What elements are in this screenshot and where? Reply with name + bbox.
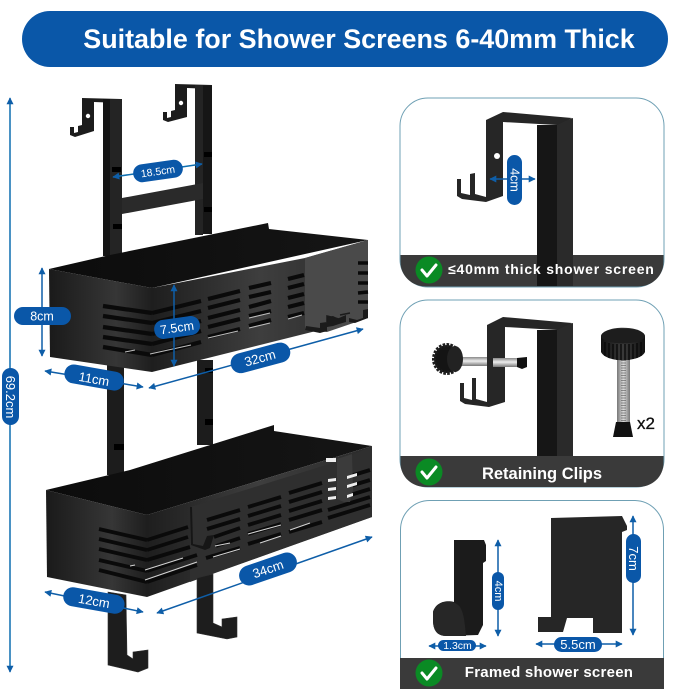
dimension: 5.5cm xyxy=(536,637,622,652)
dimension: 34cm: 34cm xyxy=(251,557,285,581)
product: double-tier shower caddy xyxy=(46,84,372,672)
slats: upper basket xyxy=(103,263,368,355)
dimension: 8cm: 8cm xyxy=(30,310,54,324)
white glimpse highlights: lower basket xyxy=(326,458,357,500)
panel: thick shower screen xyxy=(400,98,664,287)
caption text: Retaining Clips xyxy=(482,465,602,483)
icon: green check xyxy=(416,256,442,284)
caption text: ≤40mm thick shower screen xyxy=(448,261,655,277)
title banner xyxy=(22,11,668,67)
lower basket xyxy=(46,425,372,597)
lower posts and hooks xyxy=(108,574,237,672)
icon: large framed plate xyxy=(538,516,627,633)
dimension: 12cm xyxy=(45,586,143,615)
dimension: 4cm: 4cm xyxy=(492,581,504,601)
clip on lower basket xyxy=(190,507,214,550)
dimension: 8cm xyxy=(14,268,71,356)
panel: framed shower screen xyxy=(400,500,664,689)
dimension: 34cm xyxy=(157,537,372,613)
dimension: 1.3cm: 1.3cm xyxy=(443,640,472,652)
middle posts xyxy=(107,360,213,475)
dimension: 7cm: 7cm xyxy=(626,546,641,571)
icon: hook with clip xyxy=(434,317,573,456)
upper basket xyxy=(49,223,368,372)
wall hooks: upper basket xyxy=(305,309,368,333)
caption bar xyxy=(400,658,664,689)
dimension: 7.5cm xyxy=(153,285,201,366)
dimension: overall height 69.2cm xyxy=(2,98,19,672)
dimension: 11cm: 11cm xyxy=(78,369,110,389)
icon: retaining clip xyxy=(601,328,645,437)
dimension: 12cm: 12cm xyxy=(77,591,111,611)
dimension: overall height 69.2cm: 69.2cm xyxy=(3,376,18,418)
slats: lower basket xyxy=(99,470,370,582)
dimension: 4cm: 4cm xyxy=(508,168,522,192)
icon: small framed hook xyxy=(433,540,486,636)
icon: hook on post xyxy=(457,112,573,286)
caption bar xyxy=(400,255,664,286)
dimension: 11cm xyxy=(45,363,143,392)
dimension: 32cm: 32cm xyxy=(243,347,277,369)
dimension: 7cm xyxy=(626,516,641,635)
title banner: Suitable for Shower Screens 6-40mm Thick xyxy=(83,24,635,54)
caption bar xyxy=(400,456,664,487)
dimension: 32cm xyxy=(149,329,363,388)
icon: green check xyxy=(416,660,442,686)
panel: retaining clips xyxy=(400,300,664,487)
clip on right of lower basket xyxy=(337,454,353,502)
upper hanger frame xyxy=(70,84,212,256)
dimension: 18.5cm: 18.5cm xyxy=(140,164,176,180)
dimension: 5.5cm: 5.5cm xyxy=(560,637,596,652)
icon: green check xyxy=(416,458,442,486)
dimension: 18.5cm xyxy=(113,159,202,183)
caption text: Framed shower screen xyxy=(465,664,633,681)
dimension: 4cm xyxy=(492,540,504,636)
dimension: 7.5cm: 7.5cm xyxy=(159,319,195,337)
quantity label: x2 xyxy=(637,414,655,433)
dimension: 1.3cm xyxy=(429,640,486,652)
dimension: 4cm xyxy=(490,155,535,205)
